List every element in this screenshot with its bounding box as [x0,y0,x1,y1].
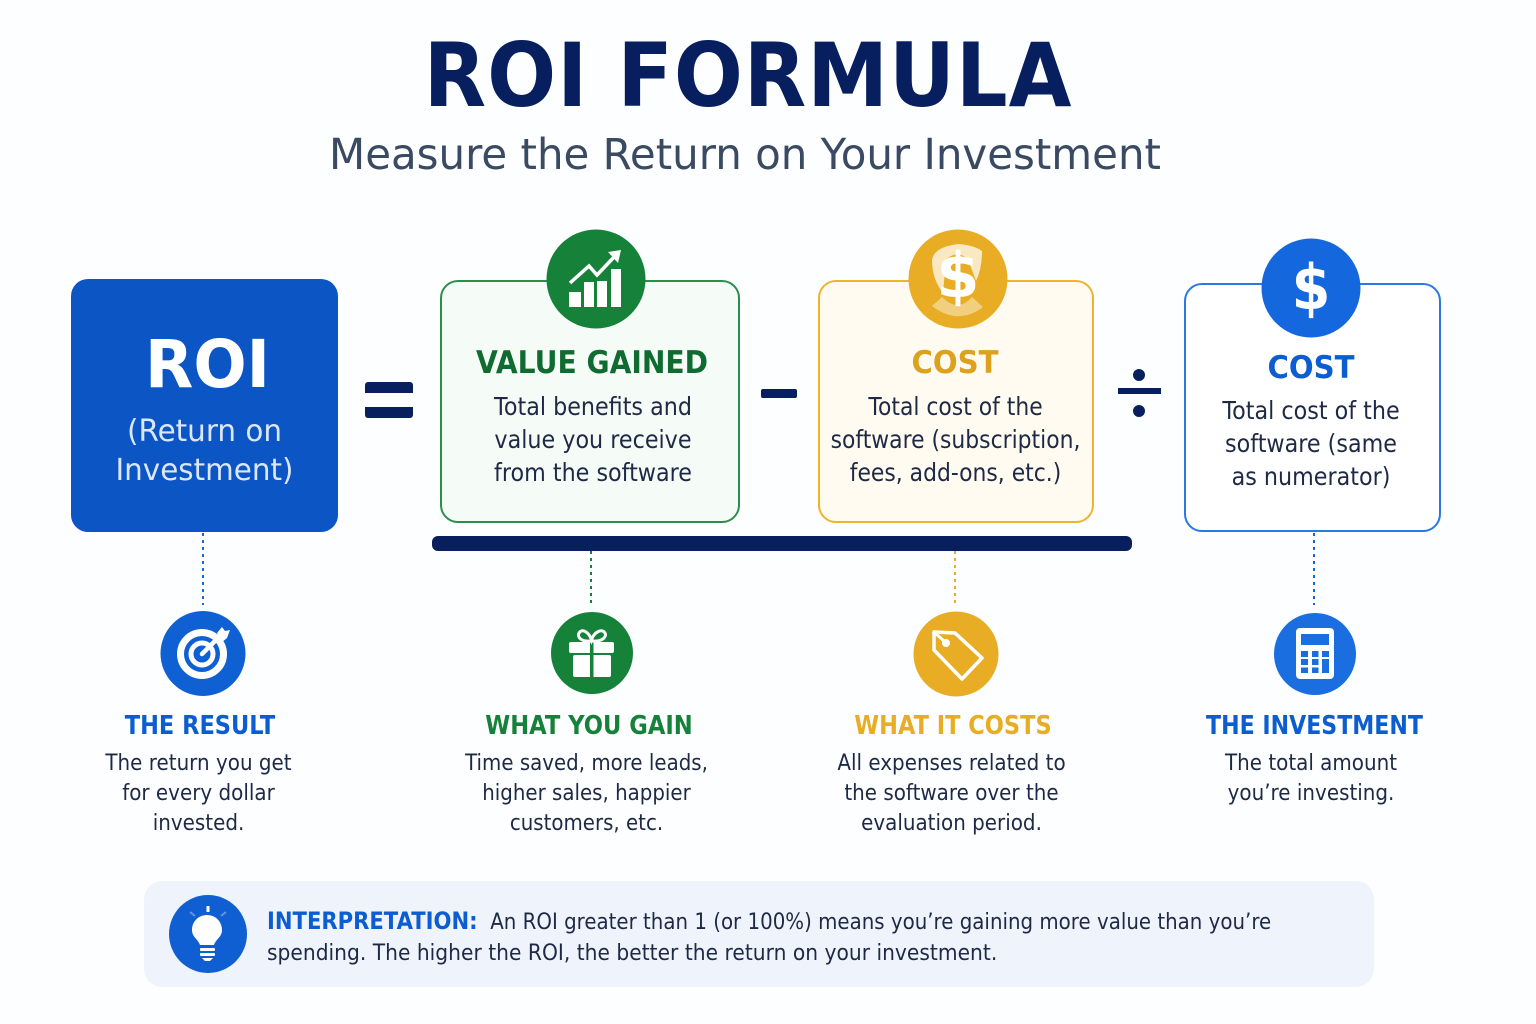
ROI heading: ROI [145,326,270,403]
cost heading: COST [911,345,999,381]
panel: value gained [440,280,740,523]
panel: cost denominator [1184,283,1441,532]
value gained text [494,392,692,487]
ROI description [115,414,293,488]
interpretation text [267,907,1271,966]
the result heading: THE RESULT [125,711,275,741]
what it costs text: All expenses related to [837,750,1066,776]
icon: gift [551,612,633,694]
icon: price tag [914,612,998,696]
interpretation text: INTERPRETATION: An ROI greater than 1 (or 100%) means you’re gaining more value than you’re [267,907,1271,935]
cost text [831,392,1080,487]
icon: light bulb [169,895,247,973]
panel: ROI [71,279,338,532]
denominator text: as numerator) [1232,462,1390,491]
what it costs text: the software over the [844,780,1059,806]
minus sign [761,389,797,398]
panel: cost [818,280,1094,523]
the result text: The return you get [105,750,292,776]
denominator text: Total cost of the [1222,396,1400,425]
the result text [105,750,292,836]
value gained text: value you receive [494,425,692,454]
ROI description: (Return on [127,414,282,449]
what it costs text [837,750,1066,836]
icon: target [160,611,246,696]
the investment text [1224,750,1397,806]
value gained text: from the software [494,458,692,487]
the investment text: you’re investing. [1228,780,1394,806]
what you gain text [465,750,708,836]
panel: interpretation [144,881,1374,987]
icon: dollar: $ [1292,251,1330,324]
icon: growth chart [546,230,646,328]
icon: dollar [1262,238,1360,338]
interpretation text: spending. The higher the ROI, the better the return on your investment. [267,940,997,966]
connectors [202,533,1315,605]
what it costs text: evaluation period. [861,810,1042,836]
fraction bar [432,536,1132,551]
title: ROI FORMULA [424,24,1072,127]
cost text: fees, add-ons, etc.) [850,458,1061,487]
what you gain text: customers, etc. [510,810,663,836]
what you gain text: Time saved, more leads, [465,750,708,776]
ROI description: Investment) [115,453,293,488]
divide sign [1118,369,1161,417]
icon: dollar shield: $ [936,239,980,312]
cost text: Total cost of the [868,392,1043,421]
denominator text: software (same [1225,429,1397,458]
cost text: software (subscription, [831,425,1080,454]
denominator heading: COST [1267,350,1355,386]
value gained text: Total benefits and [494,392,692,421]
denominator text [1222,396,1400,491]
icon: calculator [1274,613,1356,695]
the investment text: The total amount [1225,750,1397,776]
subtitle: Measure the Return on Your Investment [329,130,1161,180]
the investment heading: THE INVESTMENT [1206,711,1423,741]
the result text: invested. [153,810,244,836]
what it costs heading: WHAT IT COSTS [854,711,1052,741]
what you gain text: higher sales, happier [482,780,691,806]
what you gain heading: WHAT YOU GAIN [485,711,693,741]
the result text: for every dollar [122,780,275,806]
value gained heading: VALUE GAINED [476,345,708,381]
icon: dollar shield [908,230,1008,328]
equals sign [365,382,413,418]
